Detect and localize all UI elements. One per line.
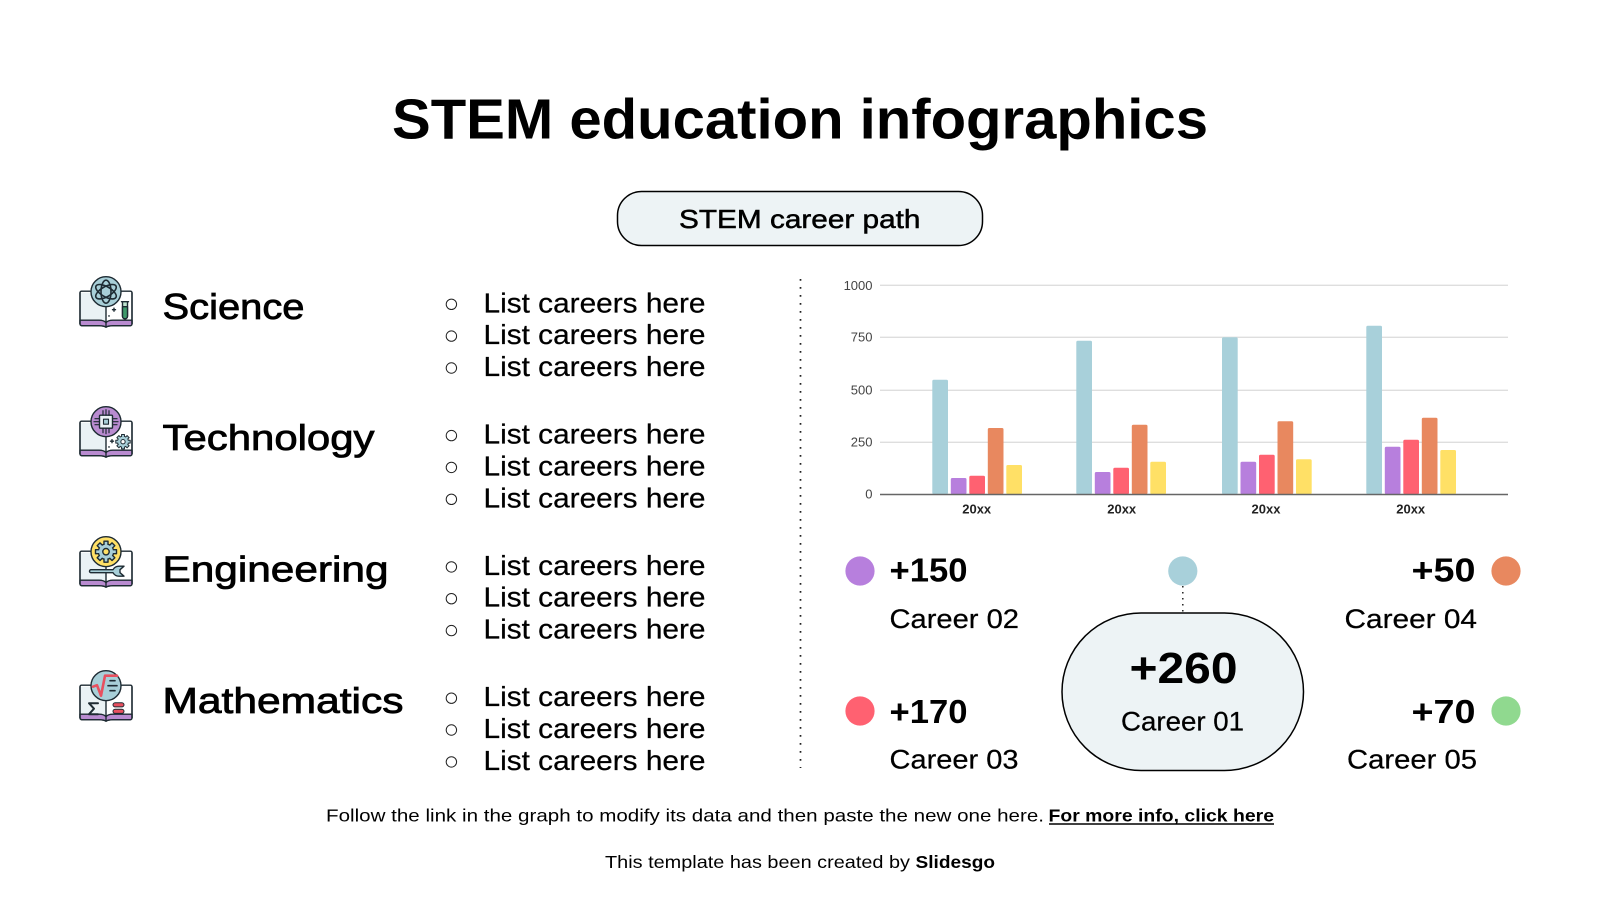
bars: group 4 <box>1366 326 1456 494</box>
panel: technology row <box>80 407 706 513</box>
career list: science: List careers here <box>484 351 706 382</box>
credit line <box>605 852 995 872</box>
credit line: This template has been created by <box>605 852 910 872</box>
career list: science: List careers here <box>484 319 706 350</box>
career list: technology: List careers here <box>484 419 706 450</box>
stat: career 02 <box>845 552 1019 634</box>
stat: career 05: +70 <box>1412 694 1476 731</box>
bars: group 1 <box>932 380 1022 494</box>
career list: mathematics: List careers here <box>484 713 706 744</box>
stat: career 05: Career 05 <box>1347 745 1477 775</box>
heading: Science: Science <box>162 286 304 327</box>
career list: science: List careers here <box>484 287 706 318</box>
credit line: Slidesgo <box>916 852 995 872</box>
career list: technology: List careers here <box>484 482 706 513</box>
stat: career 02: Career 02 <box>890 604 1019 634</box>
stat: career 02: +150 <box>890 552 968 590</box>
career list: technology: List careers here <box>484 450 706 481</box>
stat: career 03: Career 03 <box>890 745 1018 775</box>
chart y axis labels: 250 <box>851 434 872 450</box>
stat: career 01 with connector and oval <box>1062 556 1304 770</box>
career list: engineering: List careers here <box>484 550 706 581</box>
chart x axis labels: 20xx <box>1107 502 1137 516</box>
chart x axis labels: 20xx <box>962 502 992 516</box>
stat: career 03: +170 <box>890 694 968 731</box>
panel: science row <box>80 277 706 382</box>
career list: mathematics: List careers here <box>484 681 706 712</box>
career list: engineering <box>446 550 706 645</box>
panel: engineering row <box>80 537 706 645</box>
title: STEM education infographics <box>392 88 1208 152</box>
header pill: STEM career path: STEM career path <box>679 204 920 234</box>
career list: engineering: List careers here <box>484 614 706 645</box>
panel: mathematics row <box>80 671 706 776</box>
stat: career 05 <box>1347 694 1521 775</box>
bar chart <box>844 278 1508 516</box>
icon: mathematics book <box>80 671 132 721</box>
chart x axis labels: 20xx <box>1252 502 1281 516</box>
career list: mathematics: List careers here <box>484 745 706 776</box>
career list: science <box>446 287 706 382</box>
career list: mathematics <box>446 681 706 776</box>
heading: Mathematics: Mathematics <box>162 680 404 721</box>
stat: career 04: Career 04 <box>1344 604 1477 634</box>
chart x axis labels: 20xx <box>1396 502 1426 516</box>
footnote: link instruction: Follow the link in the graph to modify its data and then paste the new one here. <box>326 806 1044 826</box>
icon: engineering book <box>80 537 132 587</box>
career list: engineering: List careers here <box>484 582 706 613</box>
footnote: link instruction <box>326 806 1274 826</box>
stat: career 01 with connector and oval: Career 01 <box>1121 707 1244 737</box>
chart y axis labels <box>844 278 872 502</box>
bars: group 3 <box>1222 337 1312 494</box>
chart x axis labels <box>962 502 1426 516</box>
stat: career 03 <box>845 694 1018 775</box>
heading: Technology: Technology <box>162 417 374 458</box>
stat: career 04 <box>1344 552 1521 634</box>
stat: career 01 with connector and oval: +260 <box>1130 644 1238 693</box>
icon: science book <box>80 277 132 327</box>
chart y axis labels: 500 <box>851 382 872 398</box>
chart y axis labels: 750 <box>851 330 872 344</box>
chart y axis labels: 0 <box>865 486 872 502</box>
career list: technology <box>446 419 706 513</box>
stat: career 04: +50 <box>1412 552 1476 590</box>
bars: group 2 <box>1076 341 1166 494</box>
icon: technology book <box>80 407 132 457</box>
heading: Engineering: Engineering <box>162 548 388 590</box>
footnote: link instruction: For more info, click here <box>1048 806 1274 826</box>
header pill: STEM career path <box>618 192 982 246</box>
chart y axis labels: 1000 <box>844 278 872 293</box>
